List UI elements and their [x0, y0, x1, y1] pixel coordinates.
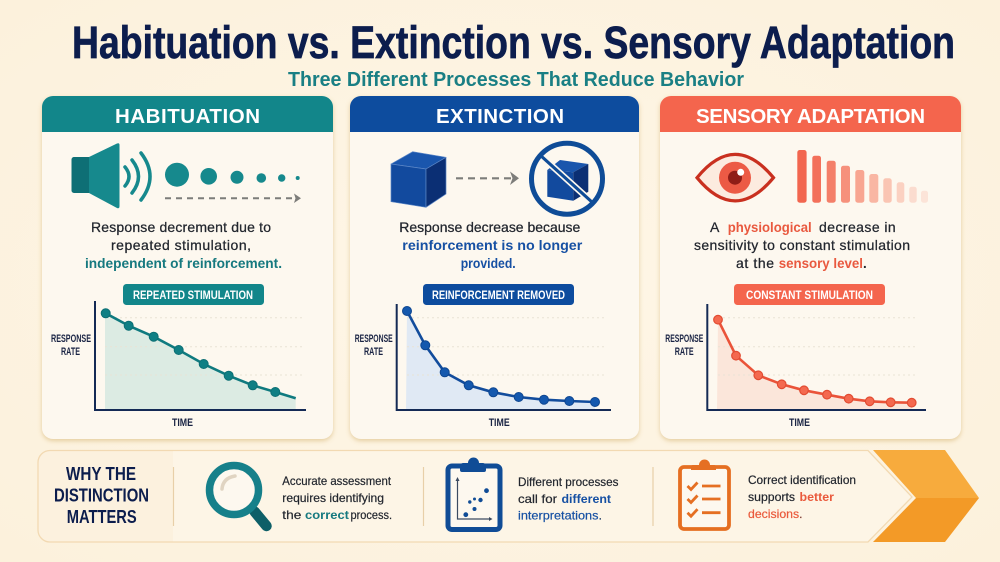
text: different processes: call for [518, 492, 557, 506]
icon: prohibited cube [532, 143, 602, 214]
pill: reinforcement removed [423, 284, 574, 305]
icon: speaker with sound waves [72, 143, 150, 208]
arrow: dashed arrow to removed reinforcer [456, 172, 519, 185]
chart: habituation response curve: TIME [172, 417, 193, 429]
text: accurate assessment: correct [305, 508, 349, 522]
pill: repeated stimulation [123, 284, 264, 305]
extinction description [399, 219, 583, 271]
chart: extinction response curve: TIME [489, 417, 510, 429]
habituation description: Response decrement due to [91, 219, 271, 235]
extinction header [350, 96, 639, 132]
chart: extinction response curve [355, 304, 611, 429]
icon: magnifying glass [210, 466, 266, 526]
chart: habituation response curve [51, 301, 306, 429]
chart: extinction response curve: RESPONSE [355, 333, 393, 345]
text: different processes: interpretations . [518, 508, 602, 522]
heading: why the distinction matters: WHY THE [66, 464, 136, 484]
habituation header: HABITUATION [115, 105, 260, 128]
text: accurate assessment: process. [350, 508, 392, 522]
chart: sensory adaptation response curve: RESPONSE [665, 333, 703, 345]
icon: shrinking stimulus dots [165, 163, 300, 187]
heading: why the distinction matters [54, 464, 149, 527]
sensory adaptation header [660, 96, 961, 132]
extinction description: provided. [461, 255, 516, 271]
heading: why the distinction matters: MATTERS [67, 507, 137, 527]
icon: checklist clipboard [680, 460, 729, 529]
sensory adaptation description: sensory level. [779, 255, 867, 271]
text: accurate assessment: the [282, 508, 302, 522]
pill: constant stimulation [734, 284, 885, 305]
chart: habituation response curve: RATE [61, 346, 80, 358]
extinction header: EXTINCTION [436, 105, 564, 128]
icon: reinforcer cube [391, 152, 446, 207]
arrow: dashed time arrow [165, 194, 301, 203]
pill: repeated stimulation: REPEATED STIMULATION [133, 290, 253, 302]
pill: constant stimulation: CONSTANT STIMULATION [746, 290, 873, 302]
text: correct identification: decisions. [748, 507, 802, 521]
text: different processes: different [562, 492, 611, 506]
pill: reinforcement removed: REINFORCEMENT REMOVED [432, 290, 565, 302]
panel: extinction [350, 96, 639, 439]
text: correct identification [748, 473, 856, 521]
subtitle: Three Different Processes That Reduce Behavior [288, 69, 744, 91]
chart: habituation response curve: RESPONSE [51, 333, 91, 345]
extinction description: Response decrease because [399, 219, 581, 235]
icon: eye [697, 154, 774, 201]
text: accurate assessment [282, 474, 392, 522]
habituation header [42, 96, 333, 132]
arrow: orange chevron [873, 450, 979, 542]
icon: clipboard with scatter plot [448, 458, 500, 530]
text: accurate assessment: Accurate assessment [282, 474, 392, 488]
icon: fading bars [797, 150, 928, 203]
chart: sensory adaptation response curve: RATE [675, 346, 694, 358]
panel: habituation [42, 96, 333, 439]
text: correct identification: Correct identification [748, 473, 856, 487]
text: correct identification: supports [748, 490, 795, 504]
sensory adaptation description: A [710, 219, 720, 235]
sensory adaptation header: SENSORY ADAPTATION [696, 105, 925, 128]
chart: extinction response curve: RATE [364, 346, 383, 358]
text: different processes [518, 475, 618, 522]
heading: why the distinction matters: DISTINCTION [54, 486, 149, 506]
text: correct identification: better [800, 490, 834, 504]
chart: sensory adaptation response curve: TIME [789, 417, 810, 429]
sensory adaptation description: sensitivity to constant stimulation [694, 237, 910, 253]
text: accurate assessment: requires identifying [282, 491, 384, 505]
habituation description: independent of reinforcement. [85, 255, 282, 271]
chart: sensory adaptation response curve [665, 304, 926, 429]
sensory adaptation description: at the [736, 255, 774, 271]
habituation description [85, 219, 282, 271]
sensory adaptation description: decrease in [819, 219, 896, 235]
text: different processes: Different processes [518, 475, 618, 489]
habituation description: repeated stimulation, [111, 237, 251, 253]
extinction description: reinforcement is no longer [402, 237, 583, 253]
panel: why the distinction matters [38, 450, 912, 542]
sensory adaptation description: physiological [728, 219, 812, 235]
panel: sensory adaptation [660, 96, 961, 439]
sensory adaptation description [694, 219, 910, 271]
